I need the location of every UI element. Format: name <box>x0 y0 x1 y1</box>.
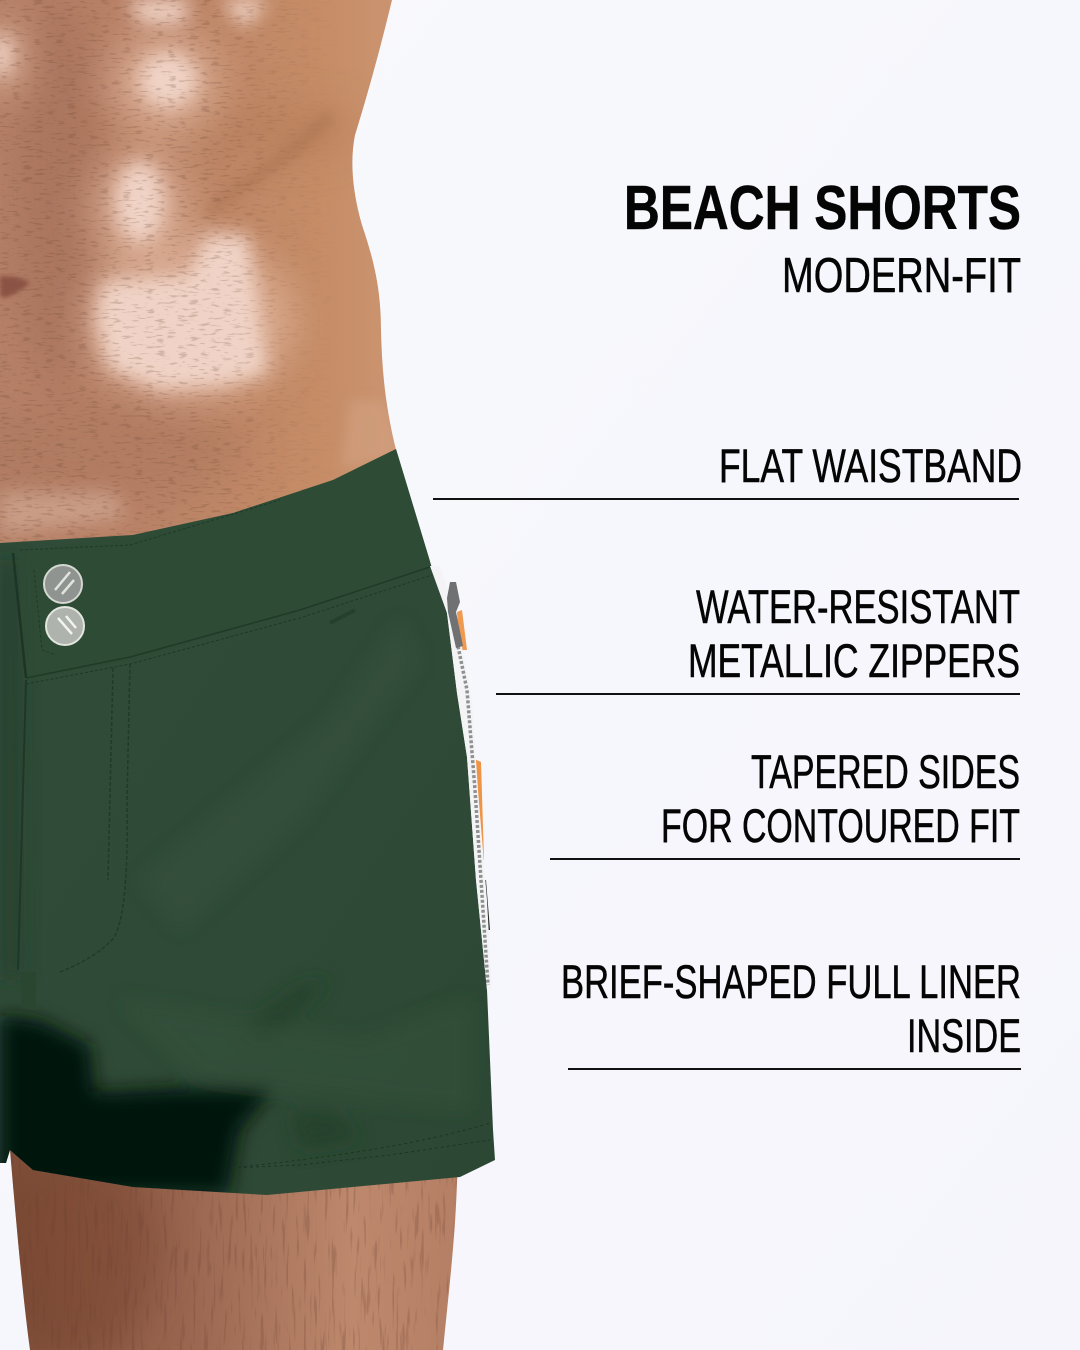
zipper pull <box>447 582 463 648</box>
soft glow around highlights <box>0 20 295 400</box>
body hair <box>0 0 298 542</box>
feature: full liner <box>561 955 1021 1070</box>
waistband seam <box>26 567 430 678</box>
feature: metallic zippers <box>496 580 1020 695</box>
feature: full liner: INSIDE <box>907 1009 1021 1062</box>
skin highlights <box>0 0 268 535</box>
navel <box>0 276 30 298</box>
fabric shadows <box>0 559 345 1193</box>
muscle crease <box>210 118 328 212</box>
title <box>624 174 1021 303</box>
thigh <box>0 1140 470 1350</box>
fly placket <box>18 680 26 970</box>
waistband <box>131 449 430 561</box>
side zipper with orange stripes <box>430 566 492 990</box>
hem stitching <box>232 1123 490 1168</box>
icon: metal buttons <box>44 565 84 645</box>
torso <box>0 0 396 543</box>
feature: tapered sides <box>550 745 1020 860</box>
photo: model wearing beach shorts <box>0 0 495 1350</box>
button tab <box>13 553 26 678</box>
shorts <box>0 449 495 1195</box>
